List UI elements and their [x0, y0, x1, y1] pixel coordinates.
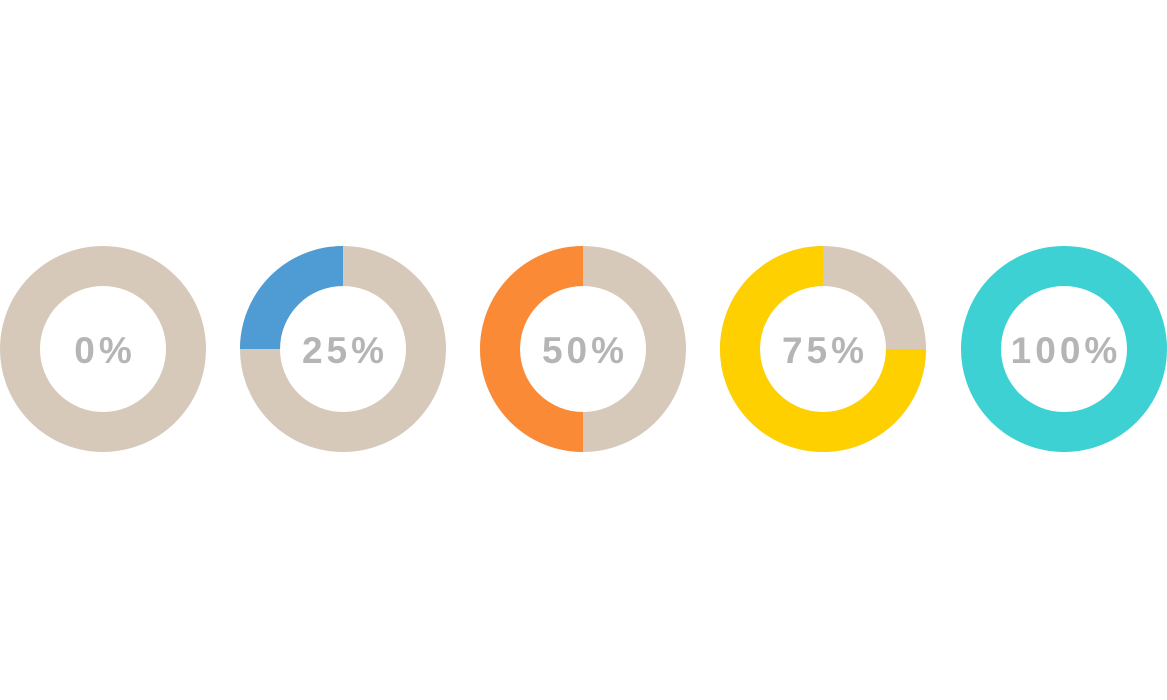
ring: 50%: 50% [542, 330, 628, 371]
ring: 50% [500, 266, 666, 432]
ring: 100% [981, 266, 1147, 432]
ring: 25% [260, 266, 426, 432]
ring: 25%: 25% [302, 330, 388, 371]
ring: 75% [740, 266, 906, 432]
ring: 0%: 0% [74, 330, 136, 371]
ring: 100%: 100% [1011, 330, 1121, 371]
ring: 75%: 75% [782, 330, 868, 371]
ring: 0% [20, 266, 186, 432]
